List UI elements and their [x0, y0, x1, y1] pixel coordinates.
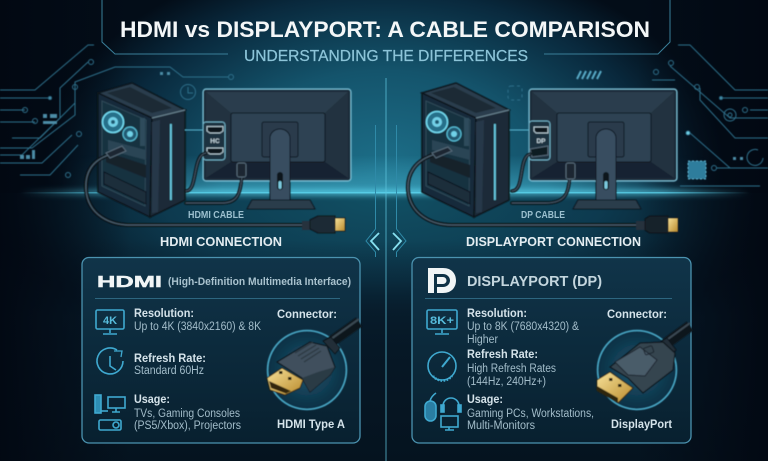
text: usage: Gaming PCs, Workstations, — [467, 408, 594, 420]
text: usage: (PS5/Xbox), Projectors — [134, 420, 241, 432]
icon: gauge — [428, 352, 456, 381]
icon: 4K monitor — [96, 310, 124, 334]
text: usage: Usage: — [134, 392, 170, 406]
icon: 4K monitor: 4K — [103, 315, 117, 327]
icon: 8K+ monitor: 8K+ — [430, 315, 454, 327]
text: resolution: Resolution: — [467, 306, 527, 320]
circuit traces left — [0, 45, 234, 178]
text: usage: TVs, Gaming Consoles — [134, 408, 240, 420]
text: refresh rate: Refresh Rate: — [467, 347, 538, 361]
text: refresh rate: Refresh Rate: — [134, 351, 206, 365]
PC tower: DP side — [422, 83, 509, 217]
center divider — [366, 78, 406, 461]
chevron right — [393, 233, 401, 250]
label: HDMI Type A: HDMI Type A — [277, 417, 345, 431]
text: refresh rate: Standard 60Hz — [134, 365, 204, 377]
cables: DP — [408, 154, 636, 225]
text: resolution: Up to 8K (7680x4320) & — [467, 321, 579, 333]
text: usage: Usage: — [467, 392, 503, 406]
panel: DisplayPort — [412, 258, 691, 443]
text: resolution: Up to 4K (3840x2160) & 8K — [134, 321, 261, 333]
heading: DISPLAYPORT CONNECTION: DISPLAYPORT CONNECTION — [466, 234, 641, 249]
text: resolution — [134, 306, 261, 333]
logo: DP — [428, 268, 456, 293]
monitor: DP side — [529, 89, 677, 209]
label: HDMI CABLE: HDMI CABLE — [188, 210, 244, 221]
label: DP CABLE: DP CABLE — [521, 210, 565, 221]
text: usage — [134, 392, 241, 432]
subtitle: UNDERSTANDING THE DIFFERENCES — [244, 48, 528, 65]
circuit traces right — [508, 45, 768, 186]
port callout: DP: DP — [536, 138, 546, 145]
panel subtitle: HDMI: (High-Definition Multimedia Interface) — [168, 276, 351, 288]
plug: HDMI — [302, 216, 345, 233]
monitor: HDMI side — [203, 89, 351, 209]
label: connector: Connector: — [277, 307, 337, 321]
panel title: DisplayPort: DISPLAYPORT (DP) — [467, 274, 602, 290]
chevron left — [371, 233, 379, 250]
icon: mouse, headset and monitor — [425, 393, 461, 430]
text: usage: Multi-Monitors — [467, 420, 535, 432]
illustration: HDMI setup — [86, 83, 351, 233]
port callout: HDMI: HC — [210, 138, 220, 145]
title frame — [102, 0, 670, 54]
title: HDMI vs DISPLAYPORT: A CABLE COMPARISON — [120, 17, 650, 42]
text: refresh rate: High Refresh Rates — [467, 363, 556, 375]
label: DisplayPort: DisplayPort — [611, 417, 672, 431]
port callout: HDMI — [185, 122, 225, 160]
heading: HDMI CONNECTION: HDMI CONNECTION — [160, 234, 282, 249]
cables: HDMI — [86, 153, 303, 225]
illustration: DP connector — [597, 323, 690, 410]
text: usage — [467, 392, 594, 432]
illustration: DP setup — [408, 83, 678, 233]
text: refresh rate: (144Hz, 240Hz+) — [467, 376, 546, 388]
icon: clock — [97, 348, 123, 374]
logo: HDMI: HDMI — [97, 274, 162, 291]
text: resolution — [467, 306, 579, 346]
icon: 8K+ monitor — [427, 310, 457, 334]
text: refresh rate — [467, 347, 556, 388]
label: connector: Connector: — [607, 307, 667, 321]
icon: console, TV and projector — [95, 395, 125, 430]
PC tower: HDMI side — [98, 83, 185, 217]
plug: DP — [636, 216, 678, 233]
text: resolution: Higher — [467, 334, 498, 346]
port callout: DP — [510, 121, 550, 160]
text: refresh rate — [134, 351, 206, 377]
text: resolution: Resolution: — [134, 306, 194, 320]
panel: HDMI — [82, 258, 360, 443]
illustration: HDMI connector — [267, 319, 359, 410]
